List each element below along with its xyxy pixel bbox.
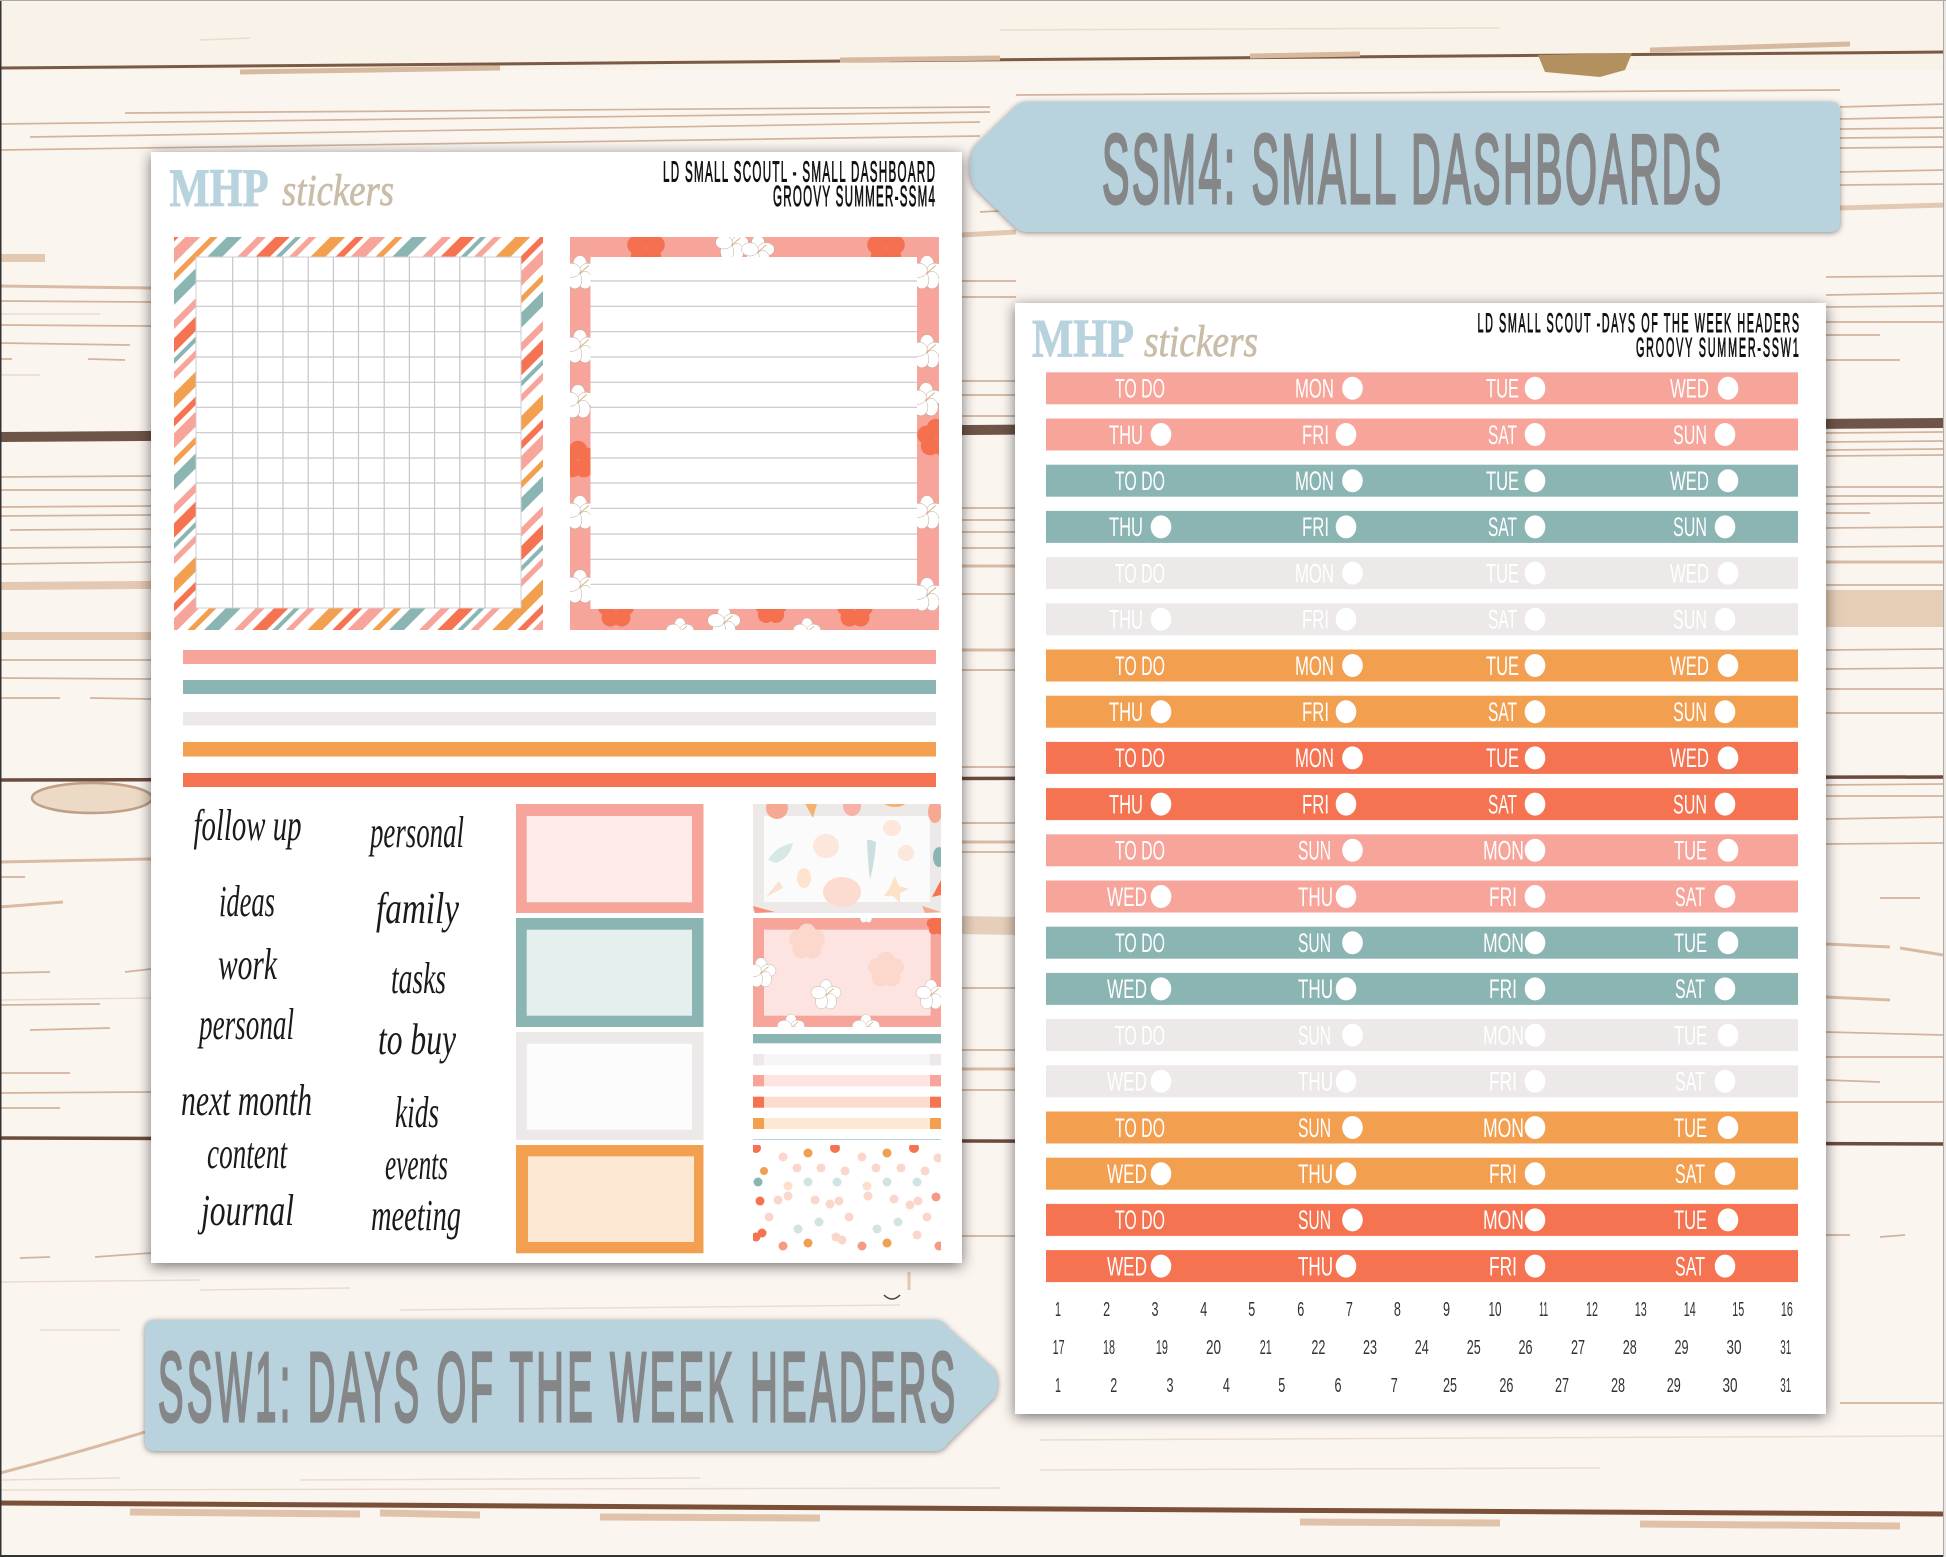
header row: orange wed: SAT	[1675, 1159, 1705, 1189]
header row: orange wed: THU	[1298, 1159, 1333, 1189]
date numbers row 3: 25	[1443, 1375, 1457, 1397]
date numbers row 2: 24	[1415, 1337, 1429, 1359]
header row: red to do, sunday start: TUE	[1674, 1205, 1707, 1235]
header row: red to do, sunday start: MON	[1483, 1205, 1524, 1235]
header row: teal wed	[1046, 973, 1798, 1005]
date numbers row 2: 29	[1674, 1337, 1688, 1359]
date numbers row 1: 16	[1781, 1299, 1793, 1321]
panel: days of the week header sticker sheet: 31	[1780, 1337, 1791, 1359]
header row: teal to do	[1046, 465, 1798, 497]
header row: teal to do, sunday start: MON	[1483, 928, 1524, 958]
header row: orange to do, sunday start: TO DO	[1115, 1113, 1165, 1143]
script word stickers: personal	[368, 808, 464, 857]
logo	[1032, 308, 1258, 368]
header row: red thu: THU	[1109, 789, 1143, 819]
header row: grey to do	[1046, 557, 1798, 589]
header row: red wed	[1046, 1250, 1798, 1282]
header row: orange to do: WED	[1670, 651, 1709, 681]
seashell pattern box	[753, 796, 945, 913]
sheet title	[663, 155, 935, 213]
header row: grey to do: TUE	[1486, 558, 1519, 588]
date numbers row 1: 4	[1200, 1299, 1207, 1321]
ribbon title: SSW1: DAYS OF THE WEEK HEADERS	[158, 1333, 955, 1442]
header row: grey wed	[1046, 1065, 1798, 1097]
header row: red to do, sunday start: SUN	[1298, 1205, 1331, 1235]
header row: teal to do, sunday start	[1046, 927, 1798, 959]
date numbers row 1	[1055, 1299, 1793, 1321]
panel: days of the week header sticker sheet	[1015, 303, 1826, 1414]
header row: red thu	[1046, 788, 1798, 820]
date numbers row 1: 3	[1152, 1299, 1158, 1321]
date numbers row 1: 2	[1103, 1299, 1110, 1321]
date numbers row 2	[1053, 1337, 1791, 1359]
header row: teal wed: FRI	[1489, 974, 1517, 1004]
header row: grey thu: FRI	[1302, 605, 1329, 635]
date numbers row 3: 29	[1667, 1375, 1681, 1397]
header row: red to do	[1046, 742, 1798, 774]
header row: teal to do, sunday start: TUE	[1674, 928, 1707, 958]
grid box with striped border	[174, 237, 543, 630]
sheet title: GROOVY SUMMER-SSM4	[773, 180, 935, 213]
date numbers row 1: 5	[1248, 1299, 1255, 1321]
header row: pink to do	[1046, 372, 1798, 404]
header row: grey wed: FRI	[1489, 1067, 1517, 1097]
header row: grey to do, sunday start: SUN	[1298, 1020, 1331, 1050]
header row: red to do: TO DO	[1115, 743, 1165, 773]
header row: red to do: MON	[1295, 743, 1334, 773]
header row: orange thu: THU	[1109, 697, 1143, 727]
header row: pink wed	[1046, 880, 1798, 912]
header row: orange thu: SUN	[1673, 697, 1707, 727]
header row: orange thu: FRI	[1302, 697, 1329, 727]
header row: pink to do: TO DO	[1115, 374, 1165, 404]
script word stickers: kids	[395, 1088, 439, 1137]
header row: orange to do, sunday start: SUN	[1298, 1113, 1331, 1143]
script word stickers: to buy	[378, 1015, 456, 1064]
date numbers row 1: 8	[1394, 1299, 1401, 1321]
header row: red thu: SAT	[1488, 789, 1517, 819]
date numbers row 1: 10	[1488, 1299, 1502, 1321]
header row: grey thu: SAT	[1488, 605, 1517, 635]
date numbers row 3	[1055, 1375, 1791, 1397]
date numbers row 2: 20	[1206, 1337, 1221, 1359]
header row: grey to do: TO DO	[1115, 558, 1165, 588]
header row: grey thu: THU	[1109, 605, 1143, 635]
sheet title: GROOVY SUMMER-SSW1	[1636, 333, 1799, 363]
script word stickers: next month	[181, 1076, 312, 1125]
logo: MHP	[1032, 308, 1134, 368]
header row: red to do, sunday start: TO DO	[1115, 1205, 1165, 1235]
polka dot box sticker	[751, 1143, 944, 1253]
header row: pink thu: THU	[1109, 420, 1143, 450]
header row: grey thu: SUN	[1673, 605, 1707, 635]
header row: orange to do, sunday start: TUE	[1674, 1113, 1707, 1143]
header row: orange to do, sunday start	[1046, 1112, 1798, 1144]
ribbon: SSM4 small dashboards	[970, 102, 1840, 232]
header row: grey to do: WED	[1670, 558, 1709, 588]
header row: grey to do, sunday start: TUE	[1674, 1020, 1707, 1050]
header row: red wed: THU	[1298, 1251, 1333, 1281]
date numbers row 2: 17	[1053, 1337, 1065, 1359]
floral box sticker	[753, 918, 941, 1027]
header row: orange to do	[1046, 650, 1798, 682]
date numbers row 1: 7	[1346, 1299, 1353, 1321]
header row: grey to do: MON	[1295, 558, 1334, 588]
date numbers row 3: 30	[1722, 1375, 1738, 1397]
date numbers row 1: 13	[1635, 1299, 1647, 1321]
header row: grey wed: THU	[1298, 1067, 1333, 1097]
script word stickers: personal	[197, 1000, 294, 1049]
header row: orange thu	[1046, 696, 1798, 728]
header row: pink thu	[1046, 418, 1798, 450]
header row: teal thu: FRI	[1302, 512, 1329, 542]
logo: stickers	[282, 166, 394, 215]
date numbers row 2: 25	[1467, 1337, 1481, 1359]
header row: teal thu	[1046, 511, 1798, 543]
date numbers row 1: 1	[1055, 1299, 1061, 1321]
header row: teal to do: MON	[1295, 466, 1334, 496]
header row: teal wed: THU	[1298, 974, 1333, 1004]
logo: stickers	[1144, 317, 1258, 366]
sheet paper	[151, 152, 962, 1263]
header row: pink to do, sunday start: TUE	[1674, 836, 1707, 866]
header row: pink thu: SAT	[1488, 420, 1517, 450]
header row: orange wed: FRI	[1489, 1159, 1517, 1189]
script word stickers: events	[385, 1140, 448, 1189]
header row: grey to do, sunday start	[1046, 1019, 1798, 1051]
script word stickers	[181, 801, 464, 1240]
header row: red wed: WED	[1107, 1251, 1147, 1281]
washi strips	[183, 650, 936, 787]
sheet title: LD SMALL SCOUTL - SMALL DASHBOARD	[663, 155, 935, 188]
script word stickers: work	[218, 940, 278, 989]
script word stickers: follow up	[194, 801, 302, 850]
logo: MHP	[170, 158, 268, 218]
date numbers row 3: 4	[1223, 1375, 1230, 1397]
sheet paper	[1015, 303, 1826, 1414]
header row: grey wed: SAT	[1675, 1067, 1705, 1097]
header row: orange wed: WED	[1107, 1159, 1147, 1189]
date numbers row 3: 27	[1555, 1375, 1569, 1397]
header row: orange to do, sunday start: MON	[1483, 1113, 1524, 1143]
solid colour box stickers	[516, 804, 704, 1253]
header row: pink wed: SAT	[1675, 882, 1705, 912]
header row: grey thu	[1046, 603, 1798, 635]
script word stickers: journal	[197, 1186, 294, 1235]
header row: pink to do, sunday start: MON	[1483, 836, 1524, 866]
sheet title	[1478, 308, 1799, 363]
panel: small dashboard sticker sheet	[151, 152, 962, 1263]
date numbers row 1: 12	[1586, 1299, 1598, 1321]
date numbers row 2: 23	[1363, 1337, 1377, 1359]
header row: teal wed: WED	[1107, 974, 1147, 1004]
header row: orange to do: TO DO	[1115, 651, 1165, 681]
date numbers row 3: 2	[1110, 1375, 1117, 1397]
header row: pink wed: THU	[1298, 882, 1333, 912]
header row: pink to do, sunday start: TO DO	[1115, 836, 1165, 866]
script word stickers: family	[376, 884, 459, 933]
header row: pink to do, sunday start	[1046, 834, 1798, 866]
date numbers row 2: 19	[1156, 1337, 1168, 1359]
header row: red to do: WED	[1670, 743, 1709, 773]
date numbers row 2: 30	[1726, 1337, 1742, 1359]
date numbers row 3: 6	[1334, 1375, 1342, 1397]
header row: orange to do: TUE	[1486, 651, 1519, 681]
ribbon title: SSM4: SMALL DASHBOARDS	[1102, 114, 1721, 224]
date numbers row 2: 28	[1623, 1337, 1637, 1359]
header row: pink to do, sunday start: SUN	[1298, 836, 1331, 866]
header row: teal wed: SAT	[1675, 974, 1705, 1004]
header row: teal to do, sunday start: SUN	[1298, 928, 1331, 958]
header row: pink to do: MON	[1295, 374, 1334, 404]
header row: red to do: TUE	[1486, 743, 1519, 773]
date numbers row 3: 28	[1611, 1375, 1625, 1397]
header row: pink wed: FRI	[1489, 882, 1517, 912]
header row: pink to do: TUE	[1486, 374, 1519, 404]
header row: teal thu: SUN	[1673, 512, 1707, 542]
date numbers row 3: 1	[1055, 1375, 1061, 1397]
date numbers row 1: 9	[1443, 1299, 1450, 1321]
panel: days of the week header sticker sheet: 31	[1780, 1375, 1791, 1397]
header row: red thu: SUN	[1673, 789, 1707, 819]
header row: teal to do: TUE	[1486, 466, 1519, 496]
header row: teal thu: SAT	[1488, 512, 1517, 542]
date numbers row 2: 22	[1311, 1337, 1325, 1359]
header row: teal to do: WED	[1670, 466, 1709, 496]
date numbers row 1: 6	[1297, 1299, 1304, 1321]
date numbers row 3: 7	[1391, 1375, 1398, 1397]
header row: pink to do: WED	[1670, 374, 1709, 404]
logo	[170, 158, 394, 218]
date numbers row 3: 5	[1278, 1375, 1285, 1397]
header row: pink thu: FRI	[1302, 420, 1329, 450]
header row: teal to do: TO DO	[1115, 466, 1165, 496]
header row: grey wed: WED	[1107, 1067, 1147, 1097]
date numbers row 1: 11	[1539, 1299, 1548, 1321]
sheet title: LD SMALL SCOUT -DAYS OF THE WEEK HEADERS	[1478, 308, 1799, 339]
date numbers row 2: 27	[1571, 1337, 1585, 1359]
header row: grey to do, sunday start: TO DO	[1115, 1020, 1165, 1050]
date numbers row 3: 26	[1499, 1375, 1513, 1397]
lined box with floral border	[570, 237, 939, 630]
ribbon: SSW1 days of the week headers	[145, 1320, 998, 1451]
header row: pink thu: SUN	[1673, 420, 1707, 450]
header row: red wed: SAT	[1675, 1251, 1705, 1281]
header row: grey to do, sunday start: MON	[1483, 1020, 1524, 1050]
script word stickers: meeting	[371, 1191, 461, 1240]
date numbers row 2: 18	[1103, 1337, 1115, 1359]
header row: orange thu: SAT	[1488, 697, 1517, 727]
date numbers row 1: 14	[1684, 1299, 1696, 1321]
header row: teal to do, sunday start: TO DO	[1115, 928, 1165, 958]
script word stickers: tasks	[391, 954, 446, 1003]
header row: orange wed	[1046, 1158, 1798, 1190]
script word stickers: ideas	[219, 877, 275, 926]
header row: red wed: FRI	[1489, 1251, 1517, 1281]
header row: teal thu: THU	[1109, 512, 1143, 542]
date numbers row 2: 21	[1260, 1337, 1272, 1359]
script word stickers: content	[207, 1129, 288, 1178]
header row: red to do, sunday start	[1046, 1204, 1798, 1236]
date numbers row 1: 15	[1732, 1299, 1744, 1321]
header row: pink wed: WED	[1107, 882, 1147, 912]
header row: orange to do: MON	[1295, 651, 1334, 681]
date numbers row 2: 26	[1518, 1337, 1532, 1359]
narrow header strips	[753, 1034, 941, 1140]
header row: red thu: FRI	[1302, 789, 1329, 819]
date numbers row 3: 3	[1166, 1375, 1174, 1397]
